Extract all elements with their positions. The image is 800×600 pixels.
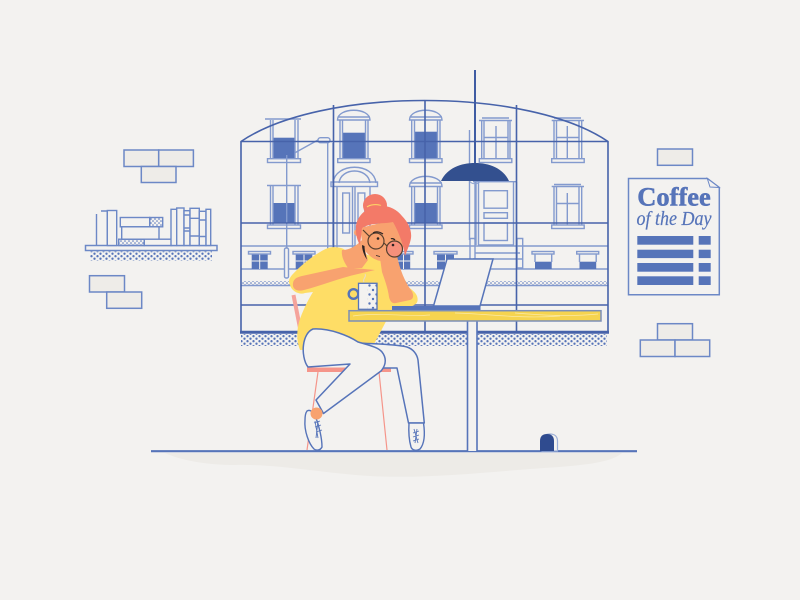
window row 1, column 4 (479, 118, 512, 162)
window frame (240, 100, 609, 332)
far leg (358, 343, 424, 423)
glasses (363, 230, 402, 257)
window row 1, column 2 (338, 110, 370, 162)
pendant lamp (441, 70, 509, 184)
basement window 4 (434, 252, 457, 269)
far ankle and shoe (409, 422, 424, 450)
neck and chest (342, 240, 368, 268)
window row 1, column 1 (265, 119, 301, 162)
menu sheet (628, 178, 719, 295)
face (360, 220, 404, 261)
pants: near thigh and far leg (303, 329, 424, 423)
brick cluster: lower right (640, 324, 710, 356)
laptop (392, 259, 493, 310)
brick cluster: lower left (90, 276, 142, 308)
right door (470, 182, 523, 268)
near shoe (305, 410, 322, 450)
chair (294, 295, 391, 450)
brick: top right (658, 149, 692, 165)
area railing dotted band (242, 281, 607, 285)
window row 2, column 3 (410, 176, 442, 228)
sweater (289, 247, 418, 350)
crossed leg (303, 329, 385, 414)
menu rows (637, 236, 711, 285)
supporting arm (380, 256, 413, 303)
hair (356, 206, 411, 256)
shelf board (86, 246, 217, 250)
eyes and mouth (373, 232, 395, 256)
basement window 5 (532, 252, 554, 269)
window row 1, column 3 (410, 110, 442, 162)
menu heading: Coffee (637, 182, 711, 212)
window row 1, column 5 (552, 118, 584, 162)
building storey lines and pilasters (241, 130, 608, 286)
window row 2, column 5 (552, 184, 584, 228)
coffee mug (349, 274, 377, 309)
shelf dotted shadow (90, 252, 212, 260)
hair bun (363, 194, 387, 217)
menu subheading: of the Day (636, 208, 712, 230)
brick cluster: top left (124, 150, 193, 182)
basement window 2 (293, 252, 315, 269)
building seen through window (241, 110, 608, 286)
near ankle (310, 408, 322, 420)
forearm on mug (293, 267, 375, 291)
dotted sill under window (241, 334, 607, 346)
window row 2, column 1 (267, 186, 301, 228)
ear (354, 229, 361, 236)
floor shadow (165, 453, 622, 477)
hair tie (367, 205, 381, 207)
mouse hole (540, 434, 558, 451)
books (96, 208, 211, 246)
menu poster (628, 178, 719, 295)
woman (289, 194, 424, 450)
floor line (151, 450, 637, 452)
folded corner (707, 178, 719, 188)
basement window 3 (393, 252, 413, 269)
left door (331, 167, 378, 248)
basement window 6 (577, 252, 599, 269)
basement window 1 (248, 252, 270, 269)
street lamp (284, 138, 330, 278)
table top (349, 311, 601, 321)
table leg (468, 321, 477, 451)
dark hair at neck (362, 245, 367, 260)
bookshelf (86, 208, 217, 260)
